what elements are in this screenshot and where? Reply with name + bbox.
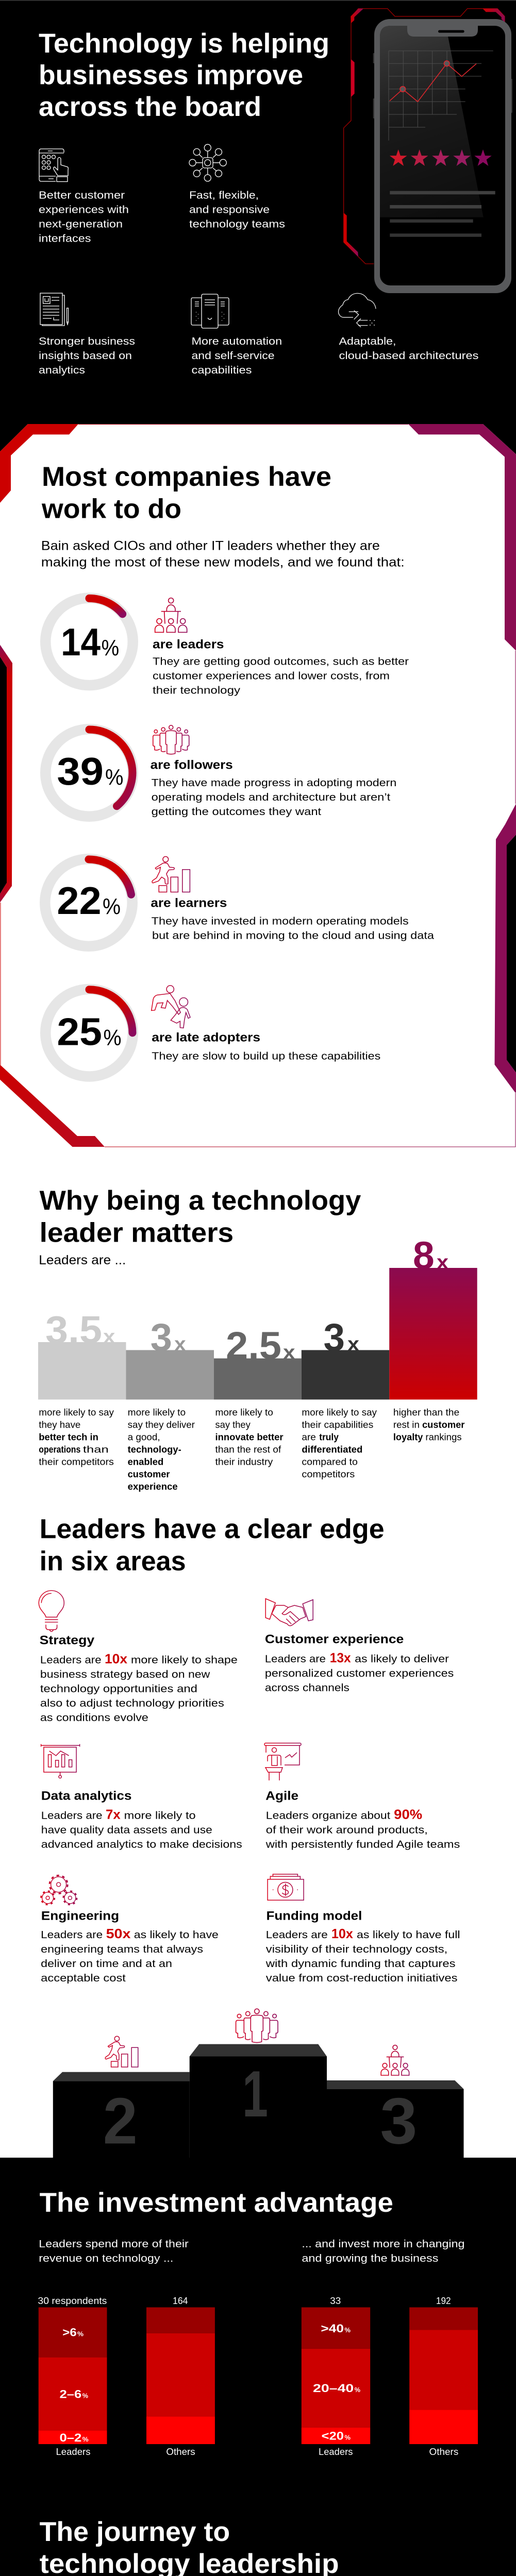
podium step 2	[53, 2072, 190, 2158]
caption: truly differentiated	[302, 1408, 377, 1480]
customer experience text: across channels	[265, 1682, 349, 1694]
icon: learners	[152, 857, 190, 892]
icon: tablet with hand	[39, 149, 68, 181]
heading: The journey to	[40, 2517, 230, 2547]
text: are learners: They have invested in modern operating models	[152, 915, 409, 927]
icon: funding money	[268, 1874, 304, 1900]
donut: 14%	[45, 598, 133, 685]
text: stronger business insights: analytics	[39, 364, 85, 376]
text: are learners: but are behind in moving to the cloud and using data	[152, 929, 435, 942]
stacked bar: change investment leaders: %	[344, 2433, 351, 2441]
agile text: Leaders organize about	[266, 1809, 390, 1822]
bar: 3x: x	[174, 1333, 186, 1355]
donut: 25%	[45, 989, 133, 1076]
funding model text: 10x	[331, 1926, 353, 1941]
funding model text	[265, 1909, 460, 1984]
panel: why being a technology leader matters	[38, 1185, 477, 1492]
text: adaptable cloud architectures	[339, 335, 478, 362]
bar: 2.5x	[214, 1324, 302, 1399]
heading: leader matters	[40, 1218, 234, 1248]
text: are late adopters: They are slow to build up these capabilities	[152, 1050, 380, 1062]
icon: network	[189, 144, 226, 181]
donut: 39%: %	[105, 765, 123, 790]
caption: customer loyalty	[393, 1408, 464, 1443]
panel: leaders have a clear edge	[39, 1514, 460, 1984]
funding model text: visibility of their technology costs,	[266, 1943, 447, 1955]
text: are followers: They have made progress in adopting modern	[152, 777, 396, 789]
customer experience text: personalized customer experiences	[265, 1667, 454, 1680]
caption: better tech: operations	[39, 1445, 80, 1455]
panel: hero	[0, 0, 516, 424]
stacked bar: change investment leaders: 33	[330, 2296, 341, 2306]
heading: Why being a technology	[40, 1185, 361, 1216]
title: businesses improve	[39, 60, 303, 91]
stacked bar: tech spend leaders: Leaders	[56, 2447, 91, 2457]
caption: truly differentiated: differentiated	[302, 1445, 362, 1455]
bar: 8x: x	[437, 1252, 448, 1274]
agile text: Agile	[265, 1789, 298, 1803]
strategy text	[40, 1633, 238, 1724]
text: are leaders: their technology	[153, 684, 241, 697]
phone chart grid	[389, 51, 493, 141]
heading	[40, 2517, 339, 2576]
bar: 3x dark: x	[347, 1333, 359, 1355]
bar: 3x: 3	[151, 1316, 172, 1359]
funding model text: Funding model	[266, 1909, 362, 1923]
funding model text: as likely to have full	[357, 1929, 460, 1941]
icon: gears	[41, 1875, 77, 1905]
intro text: Bain asked CIOs and other IT leaders whether they are	[41, 539, 380, 553]
icon: handshake	[265, 1599, 313, 1626]
rating stars	[390, 149, 492, 166]
subhead left: Leaders spend more of their	[39, 2238, 189, 2250]
caption: technology-enabled customer experience: a good,	[128, 1432, 160, 1443]
stacked bar: change investment leaders: >40	[321, 2322, 344, 2335]
text: are followers: operating models and architecture but aren’t	[152, 791, 391, 803]
strategy text: as conditions evolve	[40, 1711, 148, 1724]
icon: servers	[191, 294, 229, 328]
bar: 3x	[126, 1316, 214, 1399]
stacked bar: tech spend leaders: >6	[62, 2326, 77, 2338]
podium step 3	[327, 2080, 464, 2158]
caption: technology-enabled customer experience: say they deliver	[128, 1420, 195, 1430]
donut: 39%: 39	[57, 750, 104, 793]
stacked bar: tech spend leaders: %	[82, 2392, 88, 2400]
customer experience text	[265, 1632, 454, 1694]
podium step 3: 3	[380, 2084, 417, 2157]
text: more automation: and self-service	[192, 350, 274, 362]
title	[39, 28, 329, 122]
data analytics text: 7x	[106, 1806, 121, 1822]
text: better customer experiences: experiences with	[39, 204, 129, 215]
text: are leaders: They are getting good outcomes, such as better	[153, 655, 409, 668]
text: adaptable cloud architectures: cloud-based architectures	[339, 350, 478, 362]
stacked bar: tech spend leaders: 2–6	[60, 2387, 81, 2401]
text: stronger business insights: Stronger business	[39, 335, 135, 347]
text: adaptable cloud architectures: Adaptable,	[339, 335, 396, 347]
strategy text: Leaders are	[40, 1654, 102, 1666]
agile text	[265, 1789, 460, 1851]
bar: 3x dark: 3	[324, 1316, 345, 1359]
icon: followers on podium	[236, 2009, 278, 2043]
caption: better tech: than	[83, 1445, 109, 1455]
donut: 14%: %	[102, 635, 119, 660]
subhead right	[302, 2238, 464, 2264]
strategy text: business strategy based on new	[40, 1668, 210, 1681]
heading	[40, 1185, 361, 1248]
data analytics text: Data analytics	[41, 1789, 131, 1803]
caption: innovate better	[215, 1408, 284, 1467]
icon: learners on podium	[105, 2036, 138, 2067]
text: are leaders: customer experiences and lower costs, from	[153, 670, 390, 682]
engineering text: Engineering	[41, 1909, 119, 1923]
icon: followers	[153, 725, 189, 754]
podium step 2: 2	[103, 2084, 138, 2157]
caption: truly differentiated: their capabilities	[302, 1420, 373, 1430]
caption: innovate better: than the rest of	[215, 1445, 281, 1455]
stacked bar: change investment leaders: <20	[322, 2429, 344, 2442]
caption: truly differentiated: truly	[319, 1432, 339, 1443]
phone line chart	[390, 61, 476, 101]
bar: 2.5x: x	[283, 1342, 295, 1363]
caption: technology-enabled customer experience: experience	[128, 1482, 178, 1492]
donut: 39%	[45, 729, 133, 817]
icon: agile presenter	[264, 1743, 301, 1781]
caption: truly differentiated: compared to	[302, 1457, 358, 1467]
panel: podium	[53, 2009, 464, 2158]
bar: 2.5x: 2.5	[226, 1324, 281, 1367]
donut: 25%: 25	[57, 1010, 102, 1053]
text: are leaders	[153, 638, 409, 697]
strategy text: more likely to shape	[131, 1654, 238, 1666]
stacked bar: tech spend leaders	[38, 2296, 107, 2457]
caption: innovate better: innovate better	[215, 1432, 284, 1443]
subhead right: and growing the business	[302, 2252, 438, 2264]
icon: late adopters	[152, 986, 190, 1028]
text: better customer experiences: interfaces	[39, 233, 91, 244]
title: across the board	[39, 92, 261, 122]
stacked bar: change investment leaders: Leaders	[319, 2447, 353, 2457]
illustration: red tech frame	[344, 9, 505, 264]
caption: customer loyalty: loyalty	[393, 1432, 423, 1443]
data analytics text: more likely to	[124, 1809, 196, 1822]
donut: 25%: %	[103, 1025, 122, 1050]
text: are followers	[151, 758, 396, 818]
stacked bar: tech spend leaders: %	[77, 2330, 84, 2337]
heading: The investment advantage	[40, 2188, 393, 2218]
text: are late adopters: are late adopters	[152, 1030, 260, 1045]
text: are leaders: are leaders	[153, 638, 224, 651]
caption: customer loyalty: rest in	[393, 1420, 420, 1430]
caption: innovate better: their industry	[215, 1457, 273, 1467]
data analytics text: Leaders are	[41, 1809, 102, 1822]
text: fast flexible teams: and responsive	[189, 204, 270, 215]
stacked bar: tech spend others	[146, 2296, 215, 2457]
stacked bar: change investment others: Others	[429, 2447, 458, 2457]
text: are learners	[151, 896, 435, 942]
subhead left	[39, 2238, 189, 2264]
stacked bar: tech spend leaders: 30 respondents	[38, 2296, 107, 2306]
subheading: Leaders are ...	[39, 1253, 126, 1267]
intro text: making the most of these new models, and we found that:	[41, 555, 405, 570]
funding model text: with dynamic funding that captures	[265, 1958, 456, 1970]
caption: innovate better: say they	[215, 1420, 251, 1430]
text: more automation	[192, 335, 282, 376]
stacked bar: tech spend leaders: %	[82, 2435, 89, 2443]
caption: better tech	[39, 1408, 114, 1467]
podium step 1: 1	[242, 2057, 268, 2130]
engineering text	[41, 1909, 219, 1984]
caption: truly differentiated: competitors	[302, 1469, 355, 1480]
illustration: phone	[373, 19, 512, 293]
text: more automation: capabilities	[192, 364, 252, 376]
heading: Leaders have a clear edge	[40, 1514, 385, 1545]
text: stronger business insights: insights based on	[39, 350, 132, 362]
strategy text: 10x	[105, 1651, 128, 1666]
donut: 14%: 14	[61, 620, 101, 664]
bar: 3x dark	[302, 1316, 389, 1399]
heading	[41, 462, 331, 524]
data analytics text: advanced analytics to make decisions	[41, 1838, 242, 1851]
strategy text: also to adjust technology priorities	[40, 1697, 224, 1709]
data analytics text: have quality data assets and use	[41, 1824, 212, 1836]
icon: leaders on podium	[381, 2045, 409, 2075]
text: better customer experiences: Better customer	[39, 190, 125, 201]
heading: work to do	[41, 494, 181, 524]
donut: 22%: %	[103, 894, 121, 919]
caption: customer loyalty: rankings	[425, 1432, 462, 1443]
caption: truly differentiated: more likely to say	[302, 1408, 377, 1418]
heading: in six areas	[40, 1546, 186, 1577]
icon: leaders	[155, 598, 187, 632]
customer experience text: Customer experience	[265, 1632, 404, 1647]
text: better customer experiences: next-generation	[39, 218, 123, 230]
panel: most companies have work to do	[0, 424, 516, 1147]
engineering text: as likely to have	[134, 1929, 219, 1941]
text: better customer experiences	[39, 190, 129, 244]
customer experience text: Leaders are	[265, 1653, 326, 1665]
text: stronger business insights	[39, 335, 135, 376]
caption: customer loyalty: higher than the	[393, 1408, 459, 1418]
caption: better tech: they have	[39, 1420, 80, 1430]
heading	[40, 1514, 385, 1577]
subhead right: ... and invest more in changing	[302, 2238, 464, 2250]
intro text	[41, 539, 405, 570]
text: are late adopters	[152, 1030, 380, 1062]
engineering text: acceptable cost	[41, 1972, 126, 1984]
text: are learners: are learners	[151, 896, 227, 910]
funding model text: Leaders are	[266, 1929, 328, 1941]
caption: truly differentiated: are	[302, 1432, 316, 1443]
icon: analytics board	[41, 1744, 80, 1778]
caption: technology-enabled customer experience: technology-	[128, 1445, 181, 1455]
bar: 8x	[389, 1233, 477, 1399]
stacked bar: tech spend leaders: 0–2	[60, 2431, 81, 2444]
strategy text: technology opportunities and	[40, 1683, 197, 1695]
heading: Most companies have	[42, 462, 331, 492]
agile text: with persistently funded Agile teams	[265, 1838, 460, 1851]
icon: report document	[40, 293, 68, 326]
stacked bar: change investment leaders: 20–40	[313, 2382, 354, 2395]
phone text lines	[390, 191, 495, 237]
caption: technology-enabled customer experience	[128, 1408, 195, 1492]
stacked bar: change investment others	[409, 2296, 478, 2457]
bar: 8x: 8	[413, 1233, 435, 1277]
engineering text: engineering teams that always	[41, 1943, 203, 1955]
frame: angled border	[0, 424, 516, 1147]
strategy text: Strategy	[40, 1633, 95, 1648]
bar: 3.5x: 3.5	[45, 1308, 102, 1351]
caption: better tech: better tech in	[39, 1432, 98, 1443]
donut: 22%	[45, 859, 132, 946]
text: fast flexible teams: technology teams	[189, 218, 285, 230]
stacked bar: change investment others: 192	[436, 2296, 451, 2306]
engineering text: 50x	[106, 1926, 131, 1941]
bar: 3.5x: x	[103, 1326, 115, 1348]
caption: customer loyalty: customer	[422, 1420, 464, 1430]
engineering text: deliver on time and at an	[41, 1958, 172, 1970]
caption: better tech: more likely to say	[39, 1408, 114, 1418]
agile text: of their work around products,	[266, 1824, 428, 1836]
panel: investment advantage	[0, 2158, 516, 2576]
stacked bar: change investment leaders: %	[344, 2326, 351, 2334]
bar: 3.5x	[38, 1308, 126, 1399]
funding model text: value from cost-reduction initiatives	[266, 1972, 458, 1984]
subhead left: revenue on technology ...	[39, 2252, 173, 2264]
caption: technology-enabled customer experience: customer	[128, 1469, 170, 1480]
title: Technology is helping	[39, 28, 329, 59]
agile text: 90%	[394, 1806, 422, 1822]
stacked bar: tech spend others: 164	[173, 2296, 188, 2306]
icon: light bulb	[39, 1590, 64, 1632]
text: are followers: getting the outcomes they want	[152, 806, 322, 818]
caption: better tech: their competitors	[39, 1457, 114, 1467]
text: fast flexible teams: Fast, flexible,	[189, 190, 259, 201]
engineering text: Leaders are	[41, 1929, 103, 1941]
caption: technology-enabled customer experience: more likely to	[128, 1408, 186, 1418]
panel: journey to technology leadership	[38, 2517, 474, 2576]
icon: cloud migration	[338, 293, 376, 327]
caption: technology-enabled customer experience: enabled	[128, 1457, 163, 1467]
text: are followers: are followers	[151, 758, 233, 772]
donut: 22%: 22	[57, 879, 102, 922]
customer experience text: as likely to deliver	[355, 1653, 449, 1665]
stacked bar: tech spend others: Others	[166, 2447, 195, 2457]
podium step 1	[190, 2044, 327, 2158]
text: fast flexible teams	[189, 190, 285, 230]
caption: innovate better: more likely to	[215, 1408, 273, 1418]
data analytics text	[41, 1789, 242, 1851]
stacked bar: change investment leaders: %	[355, 2386, 360, 2394]
customer experience text: 13x	[330, 1650, 351, 1665]
stacked bar: change investment leaders	[302, 2296, 370, 2457]
text: more automation: More automation	[192, 335, 282, 347]
